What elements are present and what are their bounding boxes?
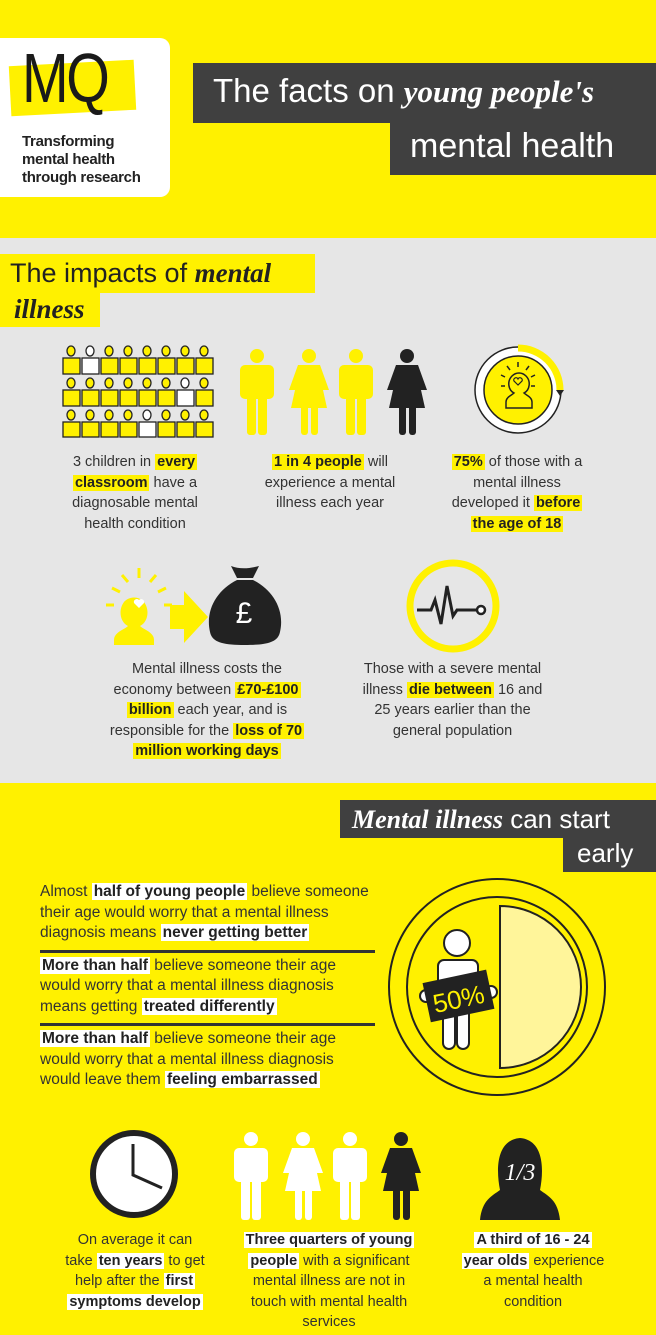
belief 1: diagnosis means never getting better	[40, 924, 307, 941]
logo tagline: through research	[22, 169, 141, 186]
belief 2: means getting treated differently	[40, 998, 275, 1014]
text: 75%	[452, 454, 582, 532]
text: three quarters: mental illness are not in	[253, 1273, 405, 1289]
text: a third: condition	[504, 1294, 562, 1310]
logo tagline: mental health	[22, 151, 115, 168]
heading: mental illness can start early: Mental illness can start	[352, 804, 610, 834]
logo mark MQ	[9, 60, 136, 116]
text: ten years: On average it can	[78, 1232, 192, 1248]
text: economy cost: million working days	[135, 743, 279, 759]
text: 1 in 4: illness each year	[276, 495, 384, 511]
text block: beliefs	[40, 883, 375, 1088]
text: die earlier	[363, 661, 542, 738]
title line 1: The facts on young people's	[213, 72, 594, 109]
text: 75%: 75% of those with a	[454, 454, 582, 470]
text: economy cost: economy between £70-£100	[114, 682, 298, 698]
text: 75%: mental illness	[473, 474, 561, 490]
text: 1 in 4: 1 in 4 people will	[274, 454, 388, 470]
text: 75%: developed it before	[452, 495, 580, 511]
text: every classroom: health condition	[84, 516, 186, 532]
belief 1	[40, 882, 375, 952]
text: ten years: take ten years to get	[65, 1252, 205, 1268]
text: every classroom: 3 children in every	[73, 454, 195, 470]
icon: clock	[90, 1130, 178, 1218]
icon: 50% circle: 50%	[430, 979, 487, 1019]
belief 3: would leave them feeling embarrassed	[40, 1071, 318, 1088]
text: economy cost: billion each year, and is	[129, 702, 287, 718]
text: 1 in 4: experience a mental	[265, 474, 395, 490]
icon: 1 in 4 people	[240, 349, 427, 435]
text: a third: year olds experience	[464, 1252, 604, 1268]
icon: head to money: £	[236, 597, 253, 630]
icon: heartbeat circle	[406, 560, 500, 652]
text: 1 in 4	[265, 454, 395, 511]
belief 2: More than half believe someone their age	[42, 956, 336, 974]
belief 3	[40, 1030, 336, 1088]
heading: mental illness can start early	[340, 800, 656, 872]
text: die earlier: 25 years earlier than the	[374, 702, 531, 718]
header background	[0, 0, 656, 238]
text: every classroom	[72, 454, 198, 532]
title line 2	[390, 118, 656, 175]
logo tagline: Transforming	[22, 133, 114, 150]
title line 1	[193, 63, 656, 123]
heading: impacts of mental illness: The impacts of mental	[10, 258, 271, 288]
text: economy cost: responsible for the loss of 70	[110, 722, 302, 738]
icon: 75% progress circle	[474, 344, 564, 434]
text: three quarters: services	[302, 1314, 356, 1330]
text: ten years: symptoms develop	[69, 1294, 201, 1310]
text: a third	[462, 1232, 604, 1310]
logo tagline	[22, 133, 141, 186]
text: three quarters: Three quarters of young	[246, 1232, 412, 1248]
text: every classroom: classroom have a	[75, 474, 197, 490]
text: a third: a mental health	[483, 1273, 583, 1289]
icon: one third silhouette: 1/3	[505, 1160, 535, 1186]
icon: 50% circle	[388, 878, 606, 1096]
text: three quarters: people with a significant	[250, 1252, 410, 1268]
belief 1: Almost half of young people believe someone	[40, 883, 369, 900]
belief 3: would worry that a mental illness diagnosis	[40, 1050, 334, 1068]
panel: impacts	[0, 238, 656, 783]
text: die earlier: Those with a severe mental	[364, 661, 541, 677]
text: economy cost	[110, 661, 304, 759]
text: economy cost: Mental illness costs the	[132, 661, 282, 677]
belief 2: would worry that a mental illness diagnosis	[40, 977, 334, 994]
heading: impacts of mental illness: illness	[14, 294, 85, 324]
logo box: MQ	[22, 39, 107, 117]
text: every classroom: diagnosable mental	[72, 495, 198, 511]
title line 2: mental health	[410, 127, 614, 165]
text: die earlier: general population	[393, 722, 512, 738]
heading: impacts of mental illness	[0, 254, 315, 327]
text: ten years	[65, 1232, 205, 1310]
icon: head to money	[106, 566, 282, 645]
text: die earlier: illness die between 16 and	[363, 682, 542, 698]
belief 2	[40, 952, 375, 1026]
text: three quarters: touch with mental health	[251, 1294, 407, 1310]
belief 1: their age would worry that a mental illness	[40, 904, 329, 920]
icon: classroom grid	[62, 345, 214, 438]
heading: mental illness can start early: early	[577, 838, 633, 868]
text: ten years: help after the first	[75, 1273, 193, 1289]
icon: one third silhouette	[480, 1138, 560, 1220]
text: three quarters	[244, 1232, 414, 1330]
icon: three quarters people	[234, 1132, 421, 1220]
text: 75%: the age of 18	[473, 516, 561, 532]
text: a third: A third of 16 - 24	[476, 1232, 590, 1248]
logo box	[0, 38, 170, 197]
belief 3: More than half believe someone their age	[42, 1030, 336, 1047]
